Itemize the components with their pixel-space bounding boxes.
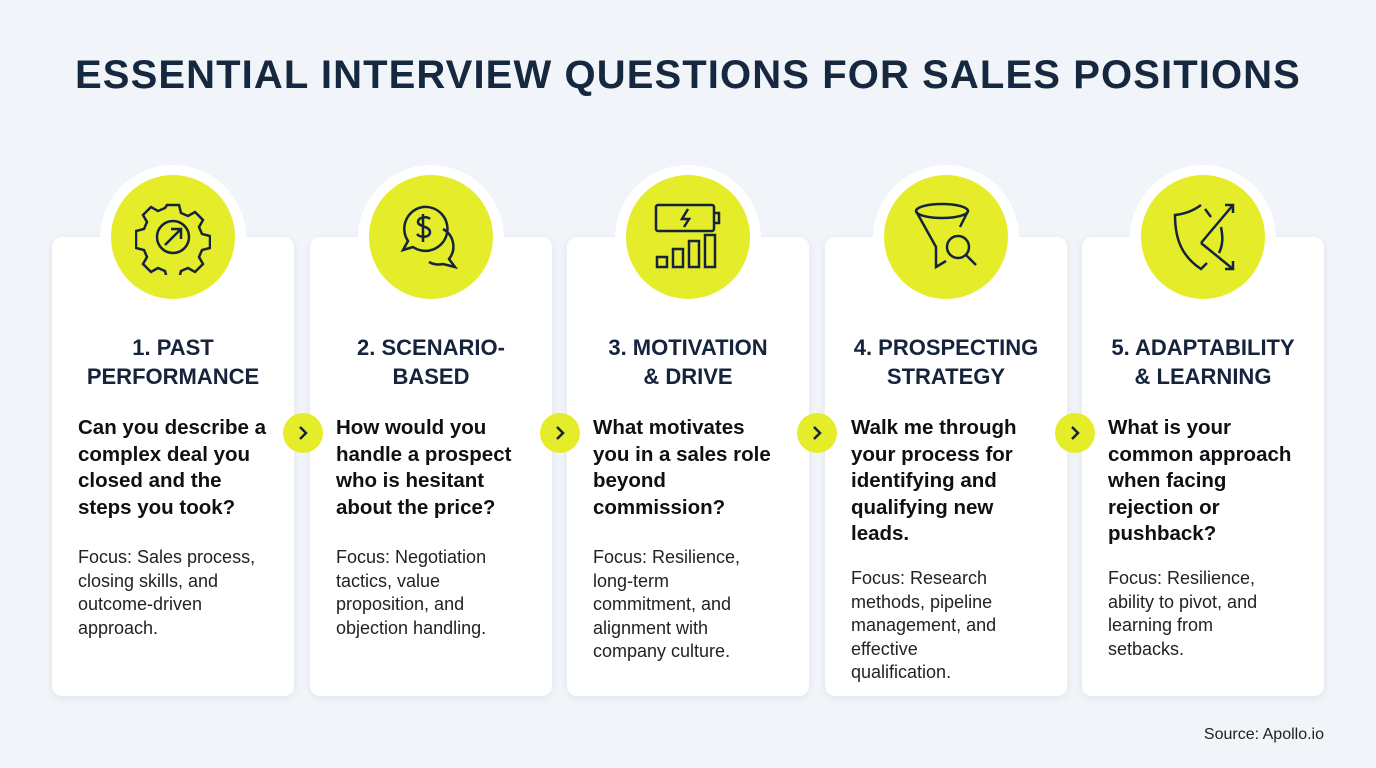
panel: card 4 (825, 237, 1067, 696)
heading: card 3: & DRIVE (643, 364, 733, 389)
heading: card 3: 3. MOTIVATION (608, 335, 768, 360)
icon: gear arrow (111, 175, 235, 299)
heading: card 3 (608, 335, 768, 389)
panel: card 1 (52, 237, 294, 696)
panel: card 5 (1082, 237, 1324, 696)
question: card 5: What is your common approach when facing rejection or pushback? (1108, 416, 1291, 545)
icon: shield arrows (1141, 175, 1265, 299)
question: card 4: Walk me through your process for identifying and qualifying new leads. (851, 416, 1017, 545)
heading: card 4 (854, 335, 1038, 389)
source: Source: Apollo.io (1204, 726, 1324, 743)
heading: card 2 (357, 335, 505, 389)
focus: card 2: Focus: Negotiation tactics, value proposition, and objection handling. (336, 547, 486, 638)
arrow 2 (540, 413, 580, 453)
icon: battery bars (626, 175, 750, 299)
question: card 2: How would you handle a prospect who is hesitant about the price? (336, 416, 511, 518)
arrow 1 (283, 413, 323, 453)
heading: card 1 (87, 335, 259, 389)
heading: card 4: STRATEGY (887, 364, 1005, 389)
heading: card 5: & LEARNING (1135, 364, 1271, 389)
heading: card 2: BASED (392, 364, 470, 389)
heading: card 2: 2. SCENARIO- (357, 335, 505, 360)
heading: card 5: 5. ADAPTABILITY (1111, 335, 1295, 360)
panel: card 2 (310, 237, 552, 696)
arrow 3 (797, 413, 837, 453)
title: ESSENTIAL INTERVIEW QUESTIONS FOR SALES POSITIONS (75, 53, 1301, 97)
focus: card 4: Focus: Research methods, pipeline management, and effective qualification. (851, 568, 996, 682)
panel: card 3 (567, 237, 809, 696)
heading: card 1: PERFORMANCE (87, 364, 259, 389)
focus: card 3: Focus: Resilience, long-term commitment, and alignment with company culture. (593, 547, 740, 661)
heading: card 1: 1. PAST (132, 335, 214, 360)
heading: card 5 (1111, 335, 1295, 389)
focus: card 1: Focus: Sales process, closing skills, and outcome-driven approach. (78, 547, 255, 638)
question: card 1: Can you describe a complex deal you closed and the steps you took? (78, 416, 266, 518)
arrow 4 (1055, 413, 1095, 453)
icon: funnel search (884, 175, 1008, 299)
question: card 3: What motivates you in a sales role beyond commission? (593, 416, 771, 518)
focus: card 5: Focus: Resilience, ability to pivot, and learning from setbacks. (1108, 568, 1257, 658)
heading: card 4: 4. PROSPECTING (854, 335, 1038, 360)
icon: dollar chat (369, 175, 493, 299)
